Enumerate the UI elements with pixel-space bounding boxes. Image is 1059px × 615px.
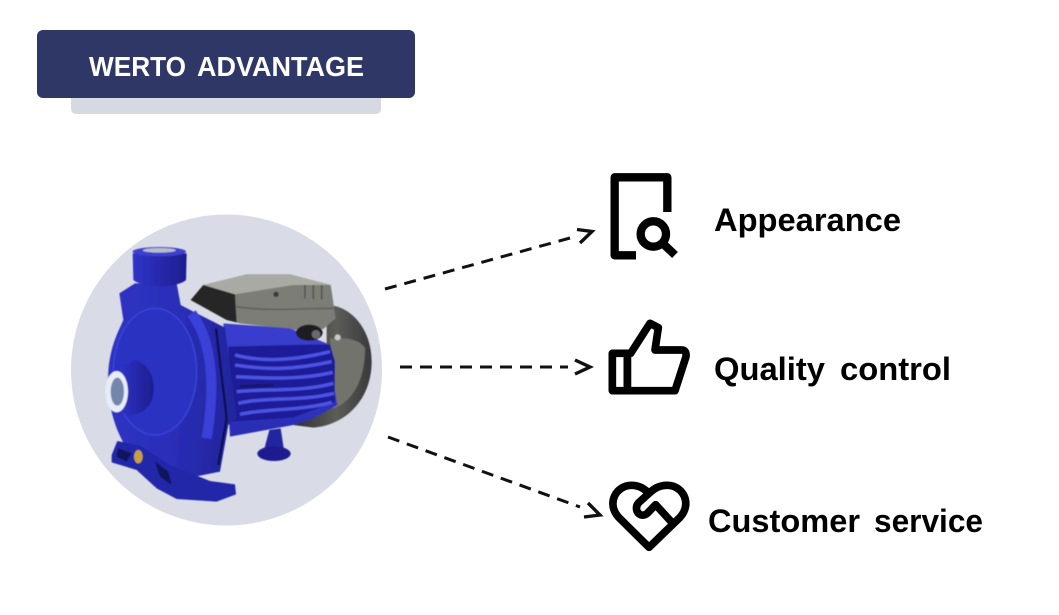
label: Quality control: control [840, 351, 951, 387]
control box [191, 274, 336, 330]
label: Quality control [714, 351, 951, 387]
label: Customer service: Customer [708, 503, 860, 539]
rear support foot [257, 428, 291, 461]
title banner: WERTO ADVANTAGE: WERTO [89, 51, 186, 82]
motor rear cap [293, 305, 372, 428]
arrow: pump to appearance [385, 230, 592, 289]
label: Customer service [708, 503, 983, 539]
icon: heart with handshake [613, 485, 686, 547]
icon: document with magnifier [615, 177, 675, 255]
arrow: pump to quality control [400, 360, 590, 374]
title banner: WERTO ADVANTAGE [37, 30, 415, 114]
label: Customer service: service [874, 503, 983, 539]
motor body with fins [223, 323, 337, 437]
inlet port [105, 360, 154, 415]
outlet port [133, 247, 187, 286]
volute and flange casing [108, 283, 237, 482]
label: Appearance: Appearance [714, 202, 901, 238]
title banner: WERTO ADVANTAGE: ADVANTAGE [197, 51, 364, 82]
product photo: blue water pump in circle [71, 214, 382, 526]
icon: thumbs up [612, 323, 686, 391]
label: Quality control: Quality [714, 351, 825, 387]
arrow: pump to customer service [388, 437, 600, 517]
base foot [112, 441, 236, 502]
